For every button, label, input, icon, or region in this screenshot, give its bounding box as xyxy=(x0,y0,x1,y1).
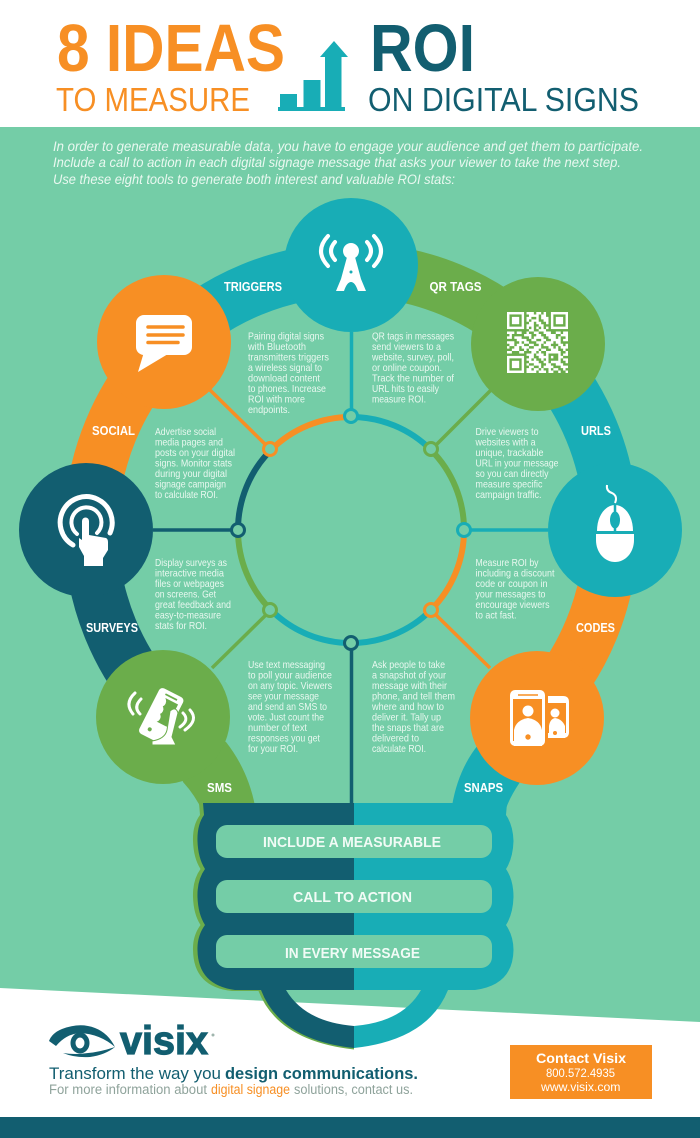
text: snaps description: calculate ROI. xyxy=(372,744,426,755)
text: qr tags description: Track the number of xyxy=(372,374,454,384)
text: urls description: Drive viewers to xyxy=(476,427,539,438)
text: snaps description: delivered to xyxy=(372,734,419,744)
text: snaps description: a snapshot of your xyxy=(372,670,446,682)
text: snaps description: Ask people to take xyxy=(372,660,445,671)
logo: visix eye xyxy=(49,1019,214,1063)
intro text: Include a call to action in each digital signage message that asks your viewer to take the next step. xyxy=(53,154,621,170)
text: snaps description: the snaps that are xyxy=(372,723,444,734)
text: sms description: Use text messaging xyxy=(248,660,325,671)
text: triggers description: a wireless signal to xyxy=(248,363,322,374)
icon: touch hand xyxy=(60,497,112,566)
title: ROI xyxy=(370,11,475,86)
text: qr tags description: or online coupon. xyxy=(372,363,442,374)
tagline: design communications. xyxy=(225,1064,418,1083)
icon: speech bubble xyxy=(136,315,192,372)
text: qr tags description: website, survey, poll, xyxy=(371,352,454,364)
pill: call to action: CALL TO ACTION xyxy=(293,889,412,906)
title: 8 IDEAS xyxy=(57,11,285,86)
icon: rising bar chart with arrow xyxy=(278,41,348,111)
text: urls description xyxy=(475,427,559,501)
text: social description xyxy=(155,427,235,501)
text: surveys description: great feedback and xyxy=(155,600,231,611)
text: surveys description: on screens. Get xyxy=(155,590,216,600)
text: sms description: see your message xyxy=(248,692,319,702)
text: triggers description: ROI with more xyxy=(248,394,305,406)
text: social description: signage campaign xyxy=(155,480,226,490)
text: urls description: websites with a xyxy=(475,438,536,448)
text: social description: Advertise social xyxy=(155,427,216,438)
tagline: solutions, contact us. xyxy=(294,1082,413,1097)
icon: antenna xyxy=(321,236,381,291)
text: codes description: to act fast. xyxy=(476,610,516,622)
panel: triggers xyxy=(224,198,418,416)
text: codes description: encourage viewers xyxy=(476,600,550,611)
pill: include a measurable xyxy=(216,825,492,858)
text: social description: signs. Monitor stats xyxy=(155,458,232,470)
text: surveys description: Display surveys as xyxy=(155,558,227,569)
text: social description: during your digital xyxy=(155,469,227,480)
intro text: Use these eight tools to generate both interest and valuable ROI stats: xyxy=(53,171,455,187)
text: triggers description: with Bluetooth xyxy=(247,342,306,353)
text: sms description: vote. Just count the xyxy=(248,712,324,724)
tagline: For more information about xyxy=(49,1082,207,1097)
text: triggers description: transmitters triggers xyxy=(248,352,329,364)
icon: qr code xyxy=(507,313,568,372)
icon: mouse xyxy=(596,485,634,562)
text: urls description: URL in your message xyxy=(476,458,559,470)
intro text: In order to generate measurable data, you have to engage your audience and get them to participate. xyxy=(53,138,643,154)
text: triggers description xyxy=(247,332,329,416)
panel: codes xyxy=(476,558,615,635)
icon: phones with portraits xyxy=(510,690,569,746)
label: social: SOCIAL xyxy=(92,424,135,438)
text: sms description: responses you get xyxy=(248,734,320,744)
inner ring with spokes and nodes xyxy=(153,332,548,805)
text: sms description: on any topic. Viewers xyxy=(248,681,332,692)
label: codes: CODES xyxy=(576,621,615,635)
text: surveys description: easy-to-measure xyxy=(155,610,221,622)
label: sms: SMS xyxy=(207,781,232,795)
text: social description: posts on your digital xyxy=(155,448,235,459)
pill: call to action xyxy=(216,880,492,913)
text: surveys description: stats for ROI. xyxy=(155,621,207,632)
text: surveys description: files or webpages xyxy=(155,579,224,590)
contact box: Contact Visix xyxy=(536,1051,627,1066)
text: qr tags description xyxy=(371,332,454,406)
title: TO MEASURE xyxy=(56,81,250,118)
logo: visix eye: visix xyxy=(120,1019,208,1063)
text: codes description: including a discount xyxy=(476,568,555,580)
panel: sms xyxy=(96,650,332,795)
text: qr tags description: measure ROI. xyxy=(372,394,426,406)
tagline xyxy=(49,1064,418,1097)
text: codes description xyxy=(476,558,555,622)
text: triggers description: download content xyxy=(248,374,320,384)
text: codes description: Measure ROI by xyxy=(476,558,539,569)
label: qr tags: QR TAGS xyxy=(430,280,482,294)
label: triggers: TRIGGERS xyxy=(224,280,282,294)
light bulb base xyxy=(193,803,514,1050)
text: sms description: for your ROI. xyxy=(248,744,298,755)
footer bar xyxy=(0,1117,700,1138)
text: sms description xyxy=(248,660,332,755)
panel: urls xyxy=(475,424,682,597)
outer ribbon ring xyxy=(91,270,611,812)
label: surveys: SURVEYS xyxy=(86,621,138,635)
title xyxy=(56,11,639,118)
text: urls description: measure specific xyxy=(476,480,542,490)
panel: social xyxy=(92,275,235,501)
pill: include a measurable: INCLUDE A MEASURABLE xyxy=(263,834,441,851)
text: urls description: unique, trackable xyxy=(476,448,544,459)
text: snaps description: message with their xyxy=(372,681,447,692)
title: ON DIGITAL SIGNS xyxy=(368,81,639,118)
text: snaps description: where and how to xyxy=(371,702,444,713)
text: social description: to calculate ROI. xyxy=(155,490,218,501)
panel: surveys xyxy=(19,463,231,635)
text: snaps description xyxy=(371,660,455,755)
text: snaps description: deliver it. Tally up xyxy=(372,712,441,724)
pill: in every message: IN EVERY MESSAGE xyxy=(285,945,420,962)
icon: phone in hand xyxy=(129,687,194,745)
text: triggers description: to phones. Increase xyxy=(248,384,326,395)
text: surveys description: interactive media xyxy=(155,568,224,580)
text: urls description: so you can directly xyxy=(476,469,549,480)
label: urls: URLS xyxy=(581,424,611,438)
text: qr tags description: QR tags in messages xyxy=(372,332,454,342)
panel: snaps xyxy=(371,651,604,795)
contact box xyxy=(510,1045,652,1099)
text: codes description: your messages to xyxy=(476,590,546,600)
text: snaps description: phone, and tell them xyxy=(372,692,455,702)
text: urls description: campaign traffic. xyxy=(476,490,542,501)
text: surveys description xyxy=(155,558,231,632)
text: social description: media pages and xyxy=(155,438,223,448)
text: sms description: and send an SMS to xyxy=(248,702,327,713)
text: qr tags description: send viewers to a xyxy=(372,342,441,353)
intro text xyxy=(53,138,643,187)
text: sms description: number of text xyxy=(248,723,307,734)
pill: in every message xyxy=(216,935,492,968)
text: codes description: code or coupon in xyxy=(476,579,548,590)
contact box: www.visix.com xyxy=(540,1082,620,1094)
text: triggers description: endpoints. xyxy=(248,405,290,416)
tagline: digital signage xyxy=(211,1082,290,1097)
label: snaps: SNAPS xyxy=(464,781,503,795)
text: qr tags description: URL hits to easily xyxy=(372,384,440,395)
text: triggers description: Pairing digital signs xyxy=(248,332,324,342)
contact box: 800.572.4935 xyxy=(546,1068,615,1080)
text: sms description: to poll your audience xyxy=(248,670,332,682)
tagline: Transform the way you xyxy=(49,1064,221,1083)
panel: qr tags xyxy=(371,277,605,411)
